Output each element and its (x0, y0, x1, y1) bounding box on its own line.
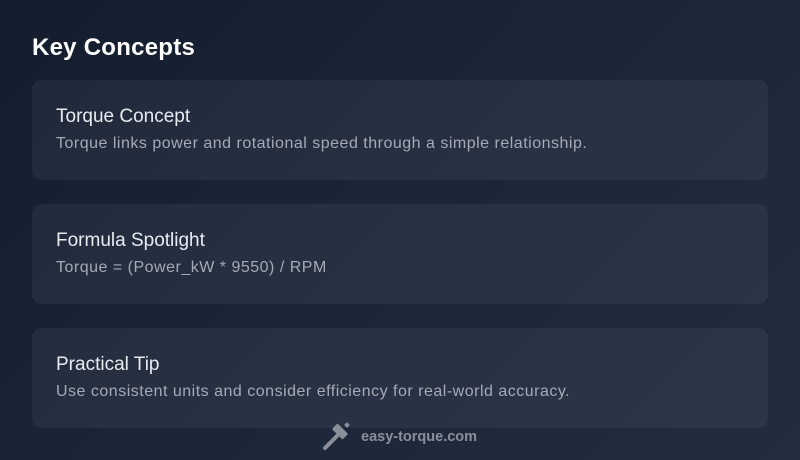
heading: Practical Tip (56, 354, 159, 375)
panel: practical tip (32, 328, 768, 428)
brand text: easy-torque.com (361, 429, 477, 445)
footer brand (322, 422, 477, 450)
heading: Formula Spotlight (56, 230, 205, 251)
text block: Torque = (Power_kW * 9550) / RPM (56, 259, 327, 276)
text block: Torque links power and rotational speed through a simple relationship. (56, 135, 587, 152)
title: Key Concepts (32, 34, 195, 61)
heading: Torque Concept (56, 106, 190, 127)
panel: torque concept (32, 80, 768, 180)
panel: formula spotlight (32, 204, 768, 304)
icon: hammer (322, 422, 350, 450)
text block: Use consistent units and consider efficiency for real-world accuracy. (56, 383, 570, 400)
